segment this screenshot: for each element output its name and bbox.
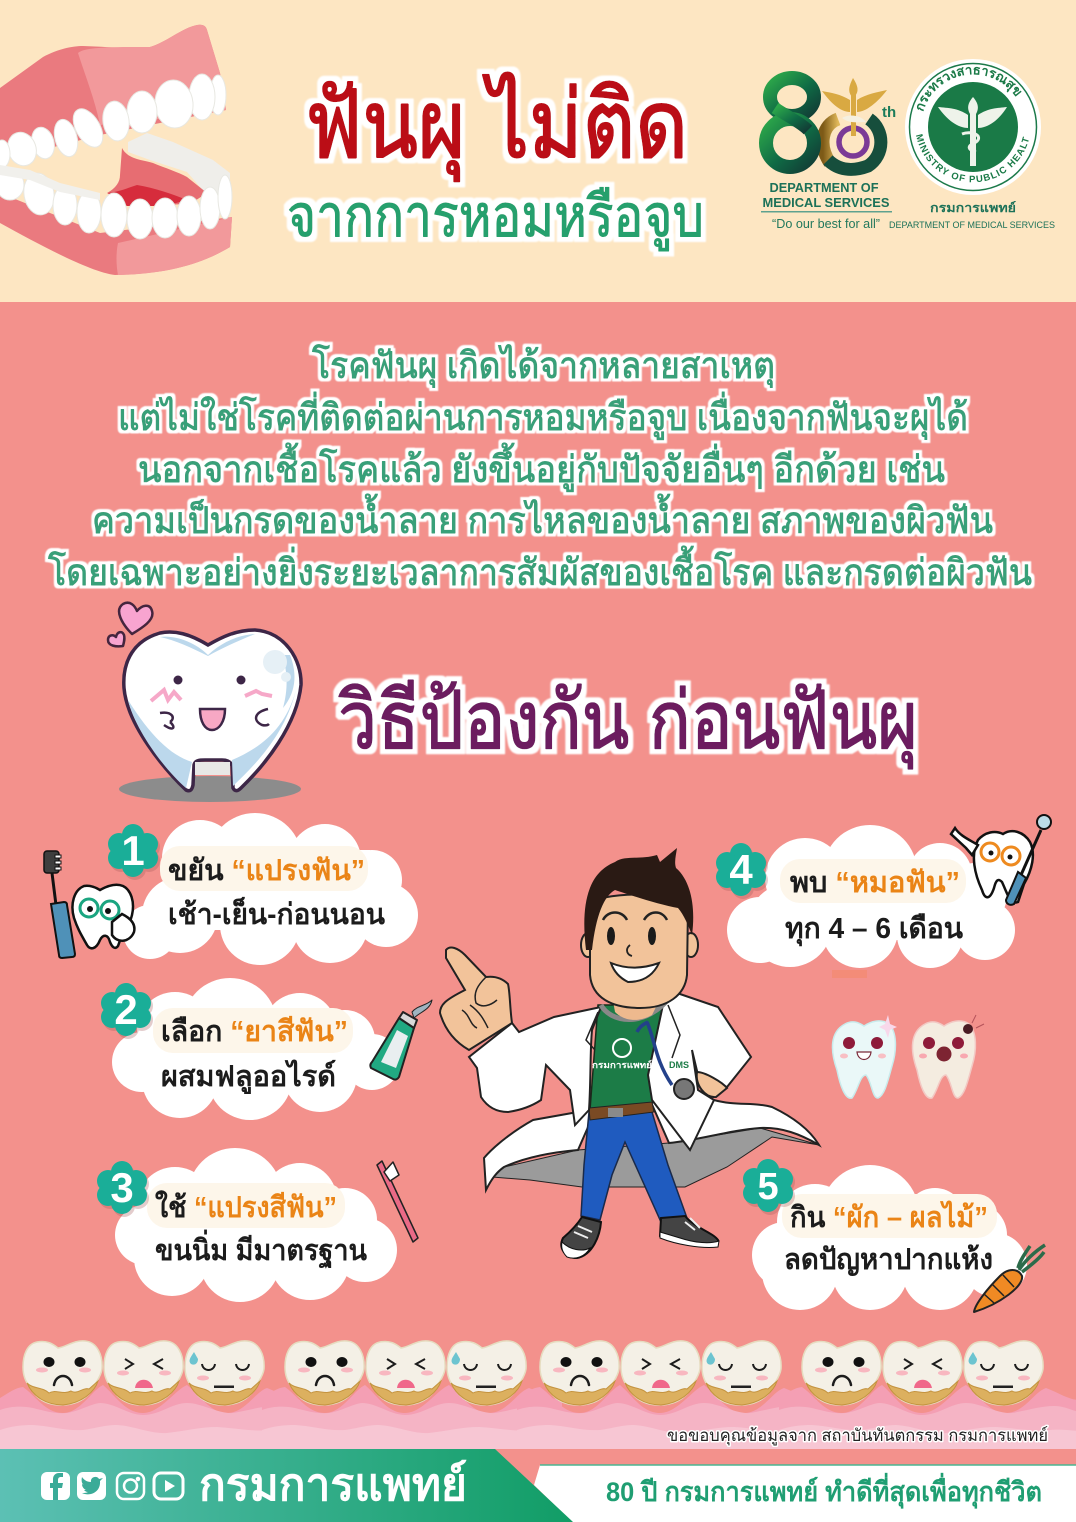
row of sad teeth — [23, 1341, 1043, 1405]
upper jaw — [0, 25, 226, 160]
seal symbol — [938, 97, 1007, 166]
step 2 — [101, 978, 432, 1120]
department name: กรมการแพทย์ — [199, 1459, 467, 1510]
badge 1: 1 — [121, 827, 145, 874]
cloud 3 — [115, 1148, 397, 1302]
step 5: ลดปัญหาปากแห้ง — [784, 1244, 993, 1277]
slogan: “Do our best for all” — [772, 217, 880, 231]
tongue — [107, 148, 207, 206]
coat right panel and arm — [648, 993, 751, 1150]
icon: toothpaste — [370, 1000, 432, 1080]
step 3 text: ใช้ “แปรงสีฟัน” — [155, 1190, 337, 1224]
badge 5: 5 — [757, 1166, 779, 1208]
icon: healthy tooth — [832, 1015, 897, 1098]
step 1: เช้า-เย็น-ก่อนนอน — [168, 896, 385, 931]
cloud 5 — [752, 1165, 1027, 1310]
credit line: ขอขอบคุณข้อมูลจาก สถาบันทันตกรรม กรมการแพทย์ — [667, 1426, 1048, 1446]
caduceus — [822, 78, 887, 136]
icon: facebook — [41, 1472, 70, 1500]
logo: DMS 80th — [761, 78, 896, 231]
gum band — [0, 1385, 1076, 1449]
step 1 text: ขยัน “แปรงฟัน” — [168, 855, 365, 887]
step 4: ทุก 4 – 6 เดือน — [785, 913, 963, 946]
orange scrap under cloud — [832, 970, 867, 978]
slogan text: 80 ปี กรมการแพทย์ ทำดีที่สุดเพื่อทุกชีวิต — [606, 1472, 1042, 1509]
step 1 — [44, 813, 418, 965]
logo: DMS 80th: MEDICAL SERVICES — [762, 195, 890, 210]
belt — [589, 1102, 654, 1120]
collar fold lines — [586, 1005, 680, 1058]
step 3 — [97, 1148, 418, 1302]
cape white right — [650, 1075, 819, 1145]
heading: how to prevent: วิธีป้องกัน ก่อนฟันผุ — [338, 676, 918, 769]
illustration: open mouth — [0, 25, 232, 275]
smile — [611, 963, 659, 982]
trousers — [581, 1112, 687, 1222]
logo: Ministry of Public Health — [889, 59, 1055, 231]
shirt lettering: DMS — [669, 1060, 689, 1070]
logo: Ministry of Public Health: กระทรวงสาธารณสุข — [916, 66, 1022, 112]
key phrase highlight — [160, 846, 368, 891]
lower teeth biting edge — [0, 165, 100, 200]
icon: instagram — [117, 1473, 144, 1499]
footer: green social banner — [0, 1449, 573, 1522]
lower jaw — [0, 193, 232, 275]
intro paragraph: แต่ไม่ใช่โรคที่ติดต่อผ่านการหอมหรือจูบ เนื่องจากฟันจะผุได้ — [118, 391, 968, 440]
header band — [0, 0, 1076, 302]
numeral 8 — [766, 78, 814, 167]
cloud 4 — [727, 825, 1015, 968]
title line 2: จากการหอมหรือจูบ — [287, 184, 704, 251]
thai name: กรมการแพทย์ — [930, 201, 1016, 215]
intro paragraph: นอกจากเชื้อโรคแล้ว ยังขึ้นอยู่กับปัจจัยอื่นๆ อีกด้วย เช่น — [138, 442, 945, 492]
footer: slogan panel — [534, 1465, 1076, 1522]
badge 4: 4 — [729, 846, 753, 893]
badge 4 — [716, 843, 768, 899]
ordinal: th — [882, 104, 896, 121]
ring lettering — [923, 74, 1023, 112]
icon: decayed tooth — [912, 1015, 984, 1098]
cloud 1 — [123, 813, 418, 965]
shirt — [590, 1005, 668, 1110]
badge 3 — [97, 1161, 149, 1217]
badge 2 — [101, 983, 153, 1039]
cloud 2 — [112, 978, 400, 1120]
title line 1: ฟันผุ ไม่ติด — [305, 72, 688, 182]
step 3: ขนนิ่ม มีมาตรฐาน — [155, 1229, 367, 1269]
cape white left — [484, 1110, 592, 1190]
intro paragraph — [48, 344, 1032, 593]
illustration: doctor mascot — [440, 848, 819, 1258]
shoes — [561, 1217, 601, 1258]
neck and head — [612, 995, 662, 1020]
right hand on hip — [697, 1072, 727, 1097]
badge 1 — [108, 824, 160, 880]
key phrase highlight — [780, 859, 966, 903]
upper teeth — [0, 74, 226, 170]
step 2: ผสมฟลูออไรด์ — [161, 1059, 336, 1094]
cape grey lining — [492, 1128, 819, 1187]
title — [287, 72, 704, 251]
coat left panel and arm — [469, 1007, 601, 1125]
icon: carrot — [974, 1245, 1045, 1312]
key phrase highlight — [782, 1194, 997, 1238]
icon: happy heart tooth — [108, 603, 301, 802]
icon: hearts — [108, 603, 152, 646]
english name: DEPARTMENT OF MEDICAL SERVICES — [889, 220, 1055, 231]
back lower teeth — [128, 133, 230, 195]
intro paragraph: โรคฟันผุ เกิดได้จากหลายสาเหตุ — [312, 344, 775, 388]
hair — [584, 848, 693, 950]
lower teeth — [0, 170, 232, 239]
icon: youtube — [154, 1473, 183, 1499]
badge 3: 3 — [110, 1164, 134, 1211]
shirt lettering — [592, 1039, 689, 1070]
icon: twitter — [77, 1472, 106, 1500]
key phrase highlight — [147, 1183, 345, 1228]
badge 2: 2 — [114, 986, 138, 1033]
intro paragraph: ความเป็นกรดของน้ำลาย การไหลของน้ำลาย สภาพของผิวฟัน — [92, 493, 993, 541]
step 2 text: เลือก “ยาสีฟัน” — [161, 1016, 348, 1048]
shirt lettering: กรมการแพทย์ — [592, 1059, 652, 1070]
numeral 0 — [823, 119, 881, 169]
key phrase highlight — [153, 1008, 353, 1053]
step 4 text: พบ “หมอฟัน” — [790, 867, 960, 899]
icon: electric toothbrush and tooth — [44, 851, 134, 958]
icon: tooth with dental mirror — [951, 815, 1051, 905]
pointing hand — [440, 948, 512, 1050]
step 5 — [743, 1159, 1045, 1312]
face — [590, 894, 688, 1008]
badge 5 — [743, 1159, 795, 1215]
icon: toothbrush — [377, 1161, 418, 1242]
eyebrows and eyes — [603, 912, 667, 920]
step 5 text: กิน “ผัก – ผลไม้” — [790, 1200, 988, 1234]
stethoscope — [601, 995, 694, 1099]
department name: DEPARTMENT OF — [770, 181, 879, 195]
ears — [581, 933, 595, 957]
step 4 — [716, 815, 1051, 978]
